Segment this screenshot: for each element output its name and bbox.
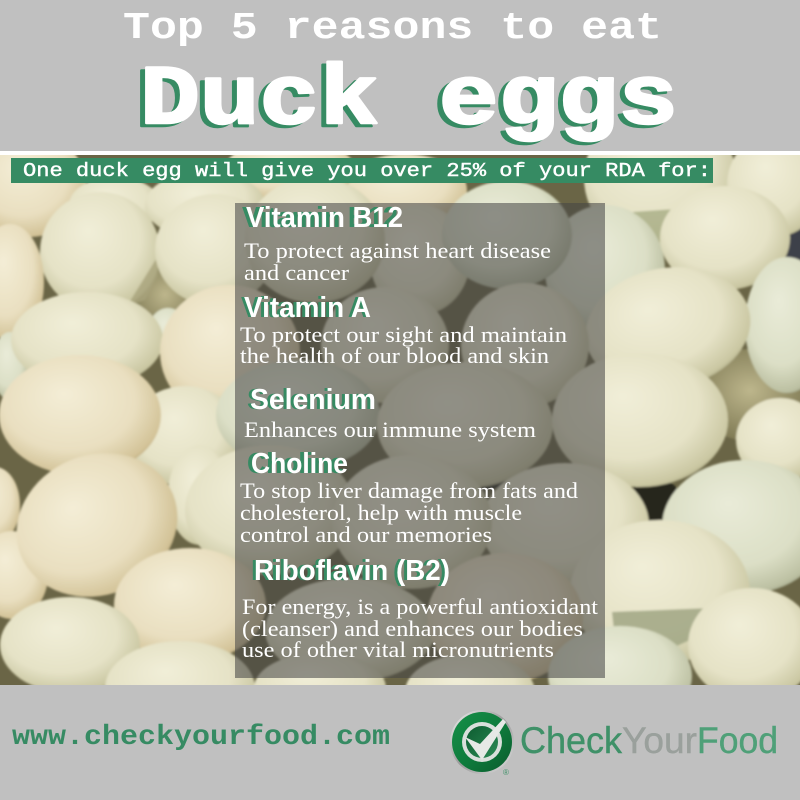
reason 3: Selenium: Selenium <box>247 384 373 416</box>
reason 2: Vitamin A <box>240 292 567 368</box>
reason 4: Choline: cholesterol, help with muscle <box>240 500 522 525</box>
subtitle strip: One duck egg will give you over 25% of your RDA for: <box>23 160 711 182</box>
translucent text panel <box>235 203 605 678</box>
header band <box>0 0 800 151</box>
reason 2: Vitamin A: Vitamin A <box>241 292 368 324</box>
reason 3: Selenium: Selenium <box>250 384 376 416</box>
logo wordmark: Food <box>697 720 778 761</box>
reason 5: Riboflavin (B2): Riboflavin (B2) <box>254 555 450 587</box>
website url: www.checkyourfood.com <box>12 722 390 753</box>
reason 4: Choline: control and our memories <box>240 522 492 547</box>
reason 4: Choline <box>240 448 578 547</box>
logo wordmark: Your <box>622 720 697 761</box>
dark gaps between eggs <box>634 483 677 521</box>
reason 1: Vitamin B12 <box>242 202 551 285</box>
reason 4: Choline: To stop liver damage from fats and <box>240 478 578 503</box>
reason 1: Vitamin B12: Vitamin B12 <box>246 202 403 234</box>
reason 3: Selenium <box>244 384 537 442</box>
icon: check badge <box>450 710 514 774</box>
reason 5: Riboflavin (B2): For energy, is a powerful antioxidant <box>242 594 599 619</box>
reason 5: Riboflavin (B2) <box>242 555 599 662</box>
reason 3: Selenium: Enhances our immune system <box>244 417 537 442</box>
reason 1: Vitamin B12: and cancer <box>244 260 350 285</box>
reason 5: Riboflavin (B2): (cleanser) and enhances our bodies <box>242 616 583 641</box>
reason 4: Choline: Choline <box>251 448 348 480</box>
white divider line <box>0 151 800 155</box>
title: Duck eggs: Duck eggs <box>140 54 678 149</box>
footer band <box>0 685 800 800</box>
title: Duck eggs: Duck eggs <box>135 57 673 152</box>
reason 5: Riboflavin (B2): use of other vital micronutrients <box>242 637 554 662</box>
title line: Top 5 reasons to eat: Top 5 reasons to eat <box>123 7 662 50</box>
photo: duck eggs <box>0 155 800 685</box>
reason 2: Vitamin A: the health of our blood and skin <box>240 343 549 368</box>
reason 4: Choline: Choline <box>247 448 344 480</box>
reason 2: Vitamin A: Vitamin A <box>244 292 371 324</box>
reason 1: Vitamin B12: Vitamin B12 <box>242 202 398 234</box>
reason 1: Vitamin B12: To protect against heart disease <box>244 238 551 263</box>
logo wordmark: Check <box>520 720 622 761</box>
logo: CheckYourFood <box>450 710 778 777</box>
reason 2: Vitamin A: To protect our sight and maintain <box>240 322 567 347</box>
reason 5: Riboflavin (B2): Riboflavin (B2) <box>251 555 447 587</box>
registered mark: ® <box>503 768 509 777</box>
